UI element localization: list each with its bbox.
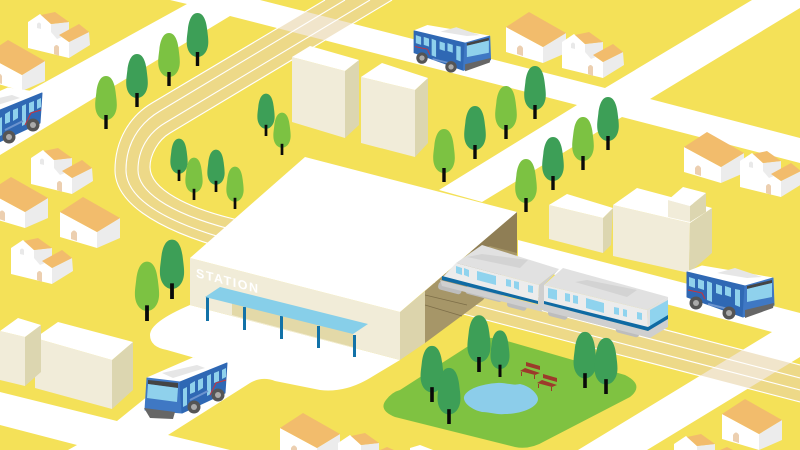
bench bbox=[520, 362, 540, 379]
station sign: STATION bbox=[196, 266, 258, 296]
tree bbox=[158, 33, 180, 86]
trees north-west bbox=[95, 13, 291, 209]
house cluster: bottom right bbox=[674, 434, 733, 450]
tree bbox=[95, 76, 117, 129]
road fragment bbox=[410, 445, 433, 450]
tree bbox=[135, 262, 159, 321]
tree bbox=[226, 167, 244, 209]
tree bbox=[421, 346, 443, 402]
canopy roof bbox=[205, 287, 368, 334]
station plaza and south road bbox=[0, 305, 400, 450]
tree bbox=[464, 106, 486, 159]
station bbox=[190, 157, 517, 360]
house cluster bbox=[562, 32, 624, 78]
tree bbox=[597, 97, 619, 150]
road network: east bbox=[518, 240, 800, 450]
tree bbox=[495, 86, 517, 139]
house cluster bbox=[31, 148, 93, 194]
tree bbox=[572, 117, 594, 170]
park bbox=[383, 315, 636, 448]
road network: north bbox=[0, 0, 800, 202]
tree bbox=[207, 150, 225, 192]
station side wall bbox=[400, 291, 425, 360]
tree bbox=[490, 330, 510, 377]
bus: west edge bbox=[0, 88, 42, 149]
tree bbox=[170, 139, 188, 181]
building: top centre left bbox=[292, 46, 359, 138]
rear carriage bbox=[437, 245, 559, 312]
house: bottom centre bbox=[280, 413, 340, 450]
building: east large bbox=[613, 187, 712, 273]
tree bbox=[574, 332, 596, 388]
bus: north bbox=[414, 25, 491, 73]
house cluster bbox=[28, 12, 90, 58]
house cluster: bottom centre bbox=[338, 433, 394, 450]
tree bbox=[257, 94, 275, 136]
building: south-west small bbox=[0, 318, 41, 386]
tree bbox=[438, 368, 460, 424]
station front wall bbox=[190, 258, 400, 360]
canopy posts bbox=[206, 297, 356, 357]
trees by station bbox=[135, 240, 184, 321]
train bbox=[437, 245, 668, 338]
tree bbox=[187, 13, 208, 66]
house bbox=[506, 12, 566, 63]
railway: curved track bbox=[115, 0, 392, 268]
tree bbox=[524, 66, 546, 119]
bus: east bbox=[687, 266, 774, 320]
tree bbox=[273, 113, 291, 155]
house cluster bbox=[11, 238, 73, 284]
tree bbox=[126, 54, 148, 107]
building: east small bbox=[549, 194, 613, 253]
house bbox=[0, 177, 48, 228]
railway: straight track bbox=[425, 267, 800, 402]
tree bbox=[185, 158, 203, 200]
trees north-east bbox=[433, 66, 619, 212]
house bbox=[684, 132, 744, 183]
station roof bbox=[190, 157, 517, 312]
house cluster bbox=[740, 151, 800, 197]
building: top centre right bbox=[361, 63, 428, 157]
front carriage bbox=[544, 268, 668, 338]
house bbox=[60, 197, 120, 248]
tree bbox=[542, 137, 564, 190]
tree bbox=[595, 338, 617, 394]
house bbox=[722, 399, 782, 450]
tree bbox=[467, 315, 491, 372]
bench bbox=[537, 374, 557, 391]
tree bbox=[160, 240, 184, 299]
pond bbox=[464, 383, 538, 414]
entrance glass bbox=[232, 300, 353, 347]
tree bbox=[515, 159, 537, 212]
tree bbox=[433, 129, 455, 182]
building: south-west large bbox=[35, 322, 133, 409]
house bbox=[0, 40, 45, 91]
lawn bbox=[383, 338, 636, 448]
tunnel mouth bbox=[425, 212, 517, 343]
bus: south-west bbox=[144, 358, 227, 419]
